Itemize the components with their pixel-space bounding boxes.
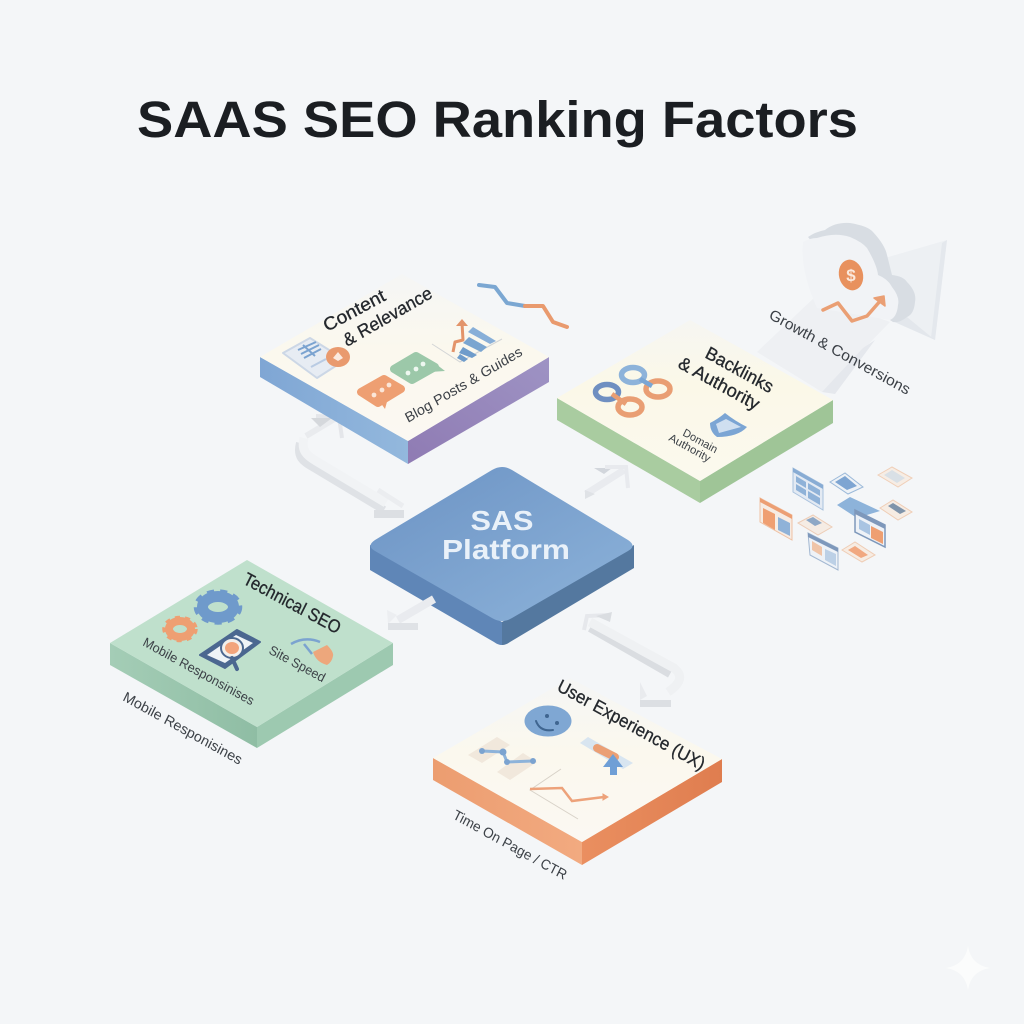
- arrow: platform to backlinks: [585, 467, 628, 499]
- left side: [557, 398, 700, 503]
- arrow: platform to technical: [387, 599, 434, 630]
- icon: chain links: [596, 368, 670, 415]
- icon: document: [283, 338, 350, 378]
- icon: shield: [710, 413, 747, 437]
- icon: cloud: [803, 223, 915, 322]
- label: domain authority: [667, 427, 719, 465]
- left side: [260, 357, 408, 464]
- top face: [433, 678, 722, 842]
- heading: platform name: SAS: [470, 505, 534, 536]
- icon: dollar coin: $: [846, 266, 856, 285]
- icon cluster: web page windows: [760, 467, 912, 570]
- icon: phone with magnifier: [200, 630, 260, 669]
- heading: content and relevance: Content: [320, 285, 389, 336]
- panel: technical SEO: [110, 560, 393, 748]
- arrow: content to platform: [299, 416, 404, 518]
- heading: technical SEO: Technical SEO: [240, 569, 344, 638]
- label: mobile responsiveness below panel: Mobile Responisines: [121, 688, 245, 768]
- big pale arrow: [757, 240, 947, 394]
- right side: [408, 357, 549, 464]
- label: time on page and CTR: Time On Page / CTR: [451, 806, 570, 883]
- right side: [502, 545, 634, 645]
- heading: backlinks and authority: & Authority: [675, 353, 763, 414]
- panel: SAS platform: [370, 467, 634, 645]
- icon: line graph: [530, 769, 608, 819]
- window: orange large: [760, 498, 792, 540]
- left side: [110, 643, 257, 748]
- icon: blue gear: [196, 592, 240, 622]
- panel: user experience: [433, 676, 722, 865]
- icon: dollar coin: [836, 257, 866, 293]
- label: mobile responsiveness on panel: Mobile Responsinises: [141, 634, 257, 709]
- label: blog posts and guides: Blog Posts & Guides: [402, 343, 525, 426]
- window: large blue: [793, 468, 823, 510]
- panel: growth and conversions: [757, 223, 947, 399]
- heading: platform name: Platform: [442, 534, 570, 565]
- window: pale orange: [878, 467, 912, 487]
- heading: backlinks and authority: Backlinks: [702, 343, 777, 397]
- icon: corner sparkle: [946, 946, 990, 990]
- right side: [582, 759, 722, 865]
- right side: [257, 643, 393, 748]
- window: center blue: [837, 497, 880, 518]
- left side: [433, 758, 582, 865]
- label: domain authority: Authority: [667, 432, 713, 465]
- window: flat blue and orange: [798, 515, 832, 535]
- heading: platform name: [442, 505, 570, 565]
- window: framed blue and orange: [855, 510, 885, 547]
- left side: [370, 545, 502, 645]
- icon: path chart: [468, 737, 537, 780]
- label: site speed: Site Speed: [267, 642, 328, 685]
- icon: orange chat bubble: [361, 379, 401, 409]
- icon: green chat bubble: [394, 356, 445, 380]
- top face: [370, 467, 632, 621]
- icon: bar chart: [432, 319, 502, 362]
- window: striped orange: [880, 500, 912, 520]
- icon: growth arrow: [823, 296, 885, 321]
- label: domain authority: Domain: [681, 427, 719, 456]
- heading: content and relevance: & Relevance: [340, 283, 435, 351]
- icon: smiley face: [524, 706, 572, 736]
- window: lower framed: [808, 533, 838, 570]
- top face: [557, 320, 833, 481]
- panel: content and relevance: [260, 274, 549, 464]
- label: growth and conversions: Growth & Conversions: [766, 306, 913, 399]
- window: flat orange: [842, 542, 875, 562]
- arrow: platform and user experience: [584, 612, 680, 707]
- icon: click cursor: [580, 737, 633, 775]
- icon: orange gear: [164, 618, 196, 640]
- top face: [110, 560, 393, 727]
- top face: [260, 274, 549, 441]
- window: flat blue: [830, 473, 863, 494]
- icon: speed gauge: [291, 639, 333, 665]
- panel: backlinks and authority: [557, 320, 833, 503]
- right side: [700, 400, 833, 503]
- decorative zigzag line: [479, 285, 567, 327]
- title: SAAS SEO Ranking Factors: [137, 91, 858, 148]
- heading: user experience: User Experience (UX): [554, 676, 708, 774]
